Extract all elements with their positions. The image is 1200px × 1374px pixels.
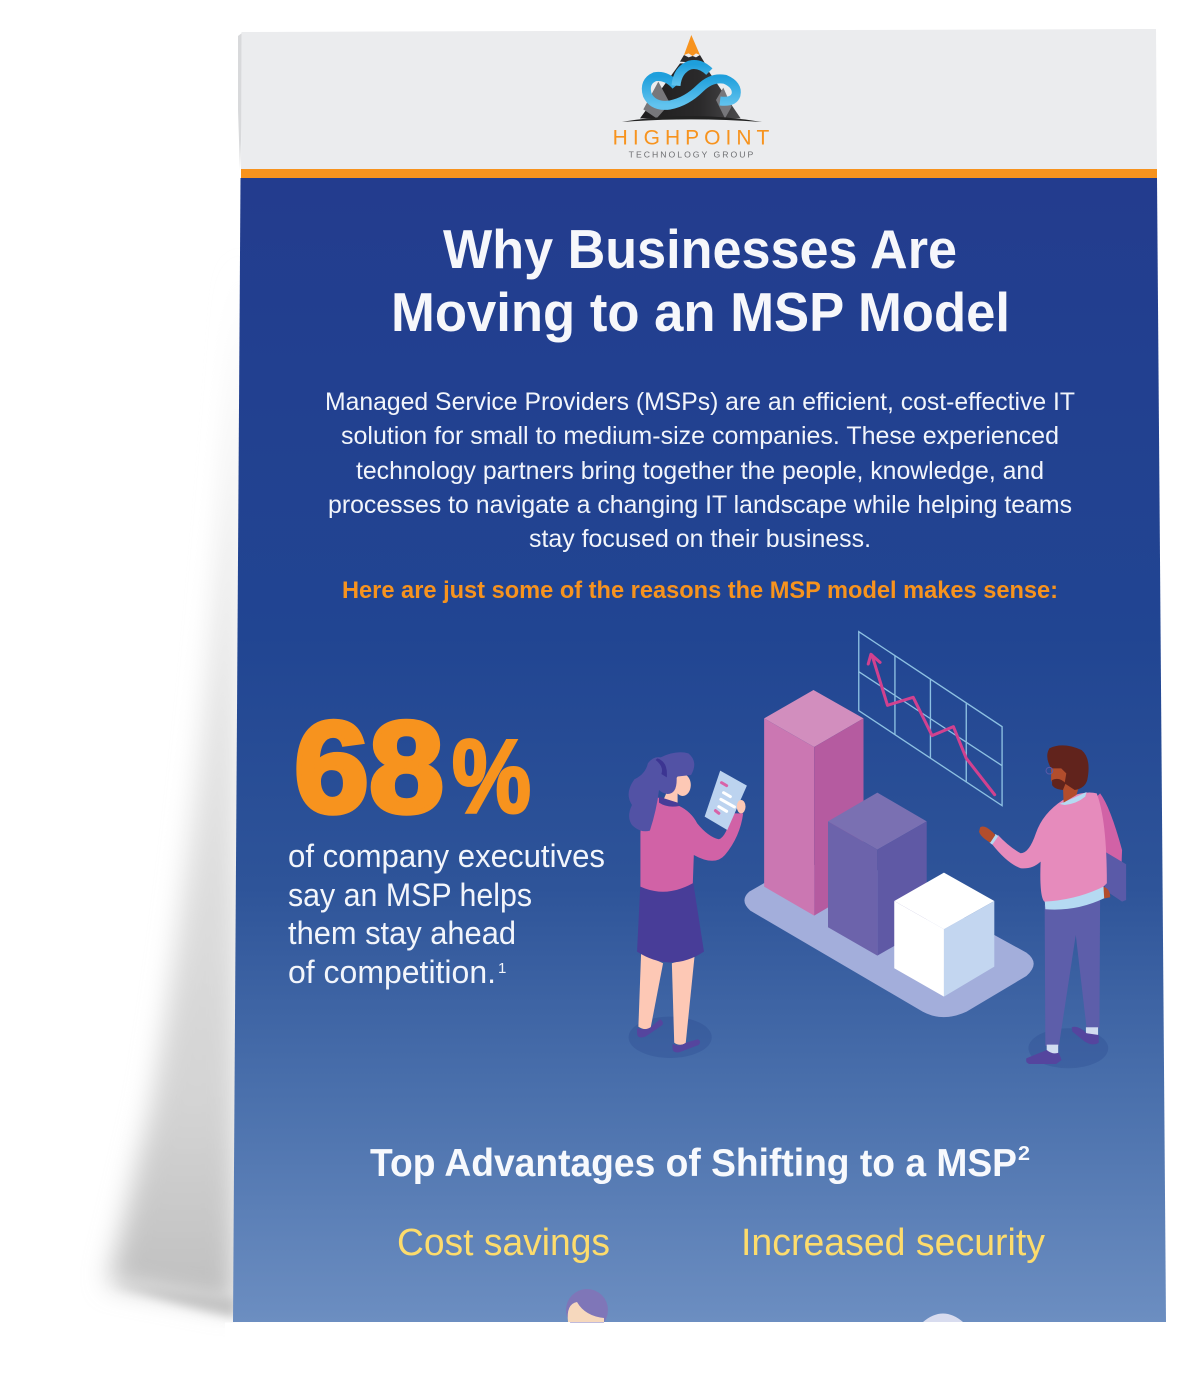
- stat description: them stay ahead: [288, 915, 516, 951]
- advantage: increased security: Increased security: [741, 1222, 1045, 1264]
- logo: [613, 35, 769, 159]
- orange rule: [241, 169, 1157, 178]
- line chart panel: [859, 632, 1002, 806]
- orange lead-in line: Here are just some of the reasons the MSP model makes sense:: [342, 577, 1058, 604]
- stat: 68%: 68: [294, 694, 444, 840]
- title: [391, 218, 1010, 343]
- stat: 68%: %: [452, 719, 531, 835]
- cropped icon at poster bottom: [923, 1314, 963, 1322]
- paper drop shadow: [108, 260, 242, 1318]
- platform: [744, 853, 1034, 1017]
- tall pink bar: [764, 690, 864, 916]
- short white bar: [894, 873, 994, 997]
- stat description: say an MSP helps: [288, 877, 532, 913]
- cropped figure at poster bottom: [225, 1289, 1175, 1352]
- intro paragraph: processes to navigate a changing IT landscape while helping teams: [328, 491, 1072, 519]
- woman figure: [629, 752, 747, 1058]
- section heading: Top Advantages of Shifting to a MSP: [370, 1142, 1017, 1185]
- stat: 68%: [294, 694, 531, 840]
- page curl edge: [238, 33, 242, 170]
- title: Moving to an MSP Model: [391, 281, 1010, 343]
- intro paragraph: technology partners bring together the people, knowledge, and: [356, 457, 1044, 485]
- trend arrow: [868, 654, 995, 795]
- intro paragraph: stay focused on their business.: [529, 525, 871, 553]
- intro paragraph: solution for small to medium-size companies. These experienced: [341, 422, 1059, 450]
- intro paragraph: Managed Service Providers (MSPs) are an efficient, cost-effective IT: [325, 388, 1075, 416]
- medium purple bar: [828, 793, 927, 956]
- stat description: of company executives: [288, 838, 605, 874]
- poster sheet: [233, 29, 1166, 1322]
- wordmark: HIGHPOINT: [613, 127, 769, 150]
- stat description: [288, 838, 605, 990]
- advantage: cost savings: Cost savings: [397, 1222, 610, 1264]
- man figure: [979, 745, 1126, 1068]
- intro paragraph: [325, 388, 1075, 553]
- logo mark: [613, 35, 769, 159]
- stat description: of competition.: [288, 954, 496, 990]
- header band: [241, 29, 1157, 170]
- tagline: TECHNOLOGY GROUP: [629, 149, 754, 159]
- title: Why Businesses Are: [443, 218, 957, 280]
- illustration: team analysing bar chart: [629, 632, 1126, 1068]
- blue body: [233, 178, 1166, 1322]
- stat description: 1: [498, 960, 506, 977]
- section heading: 2: [1018, 1143, 1030, 1165]
